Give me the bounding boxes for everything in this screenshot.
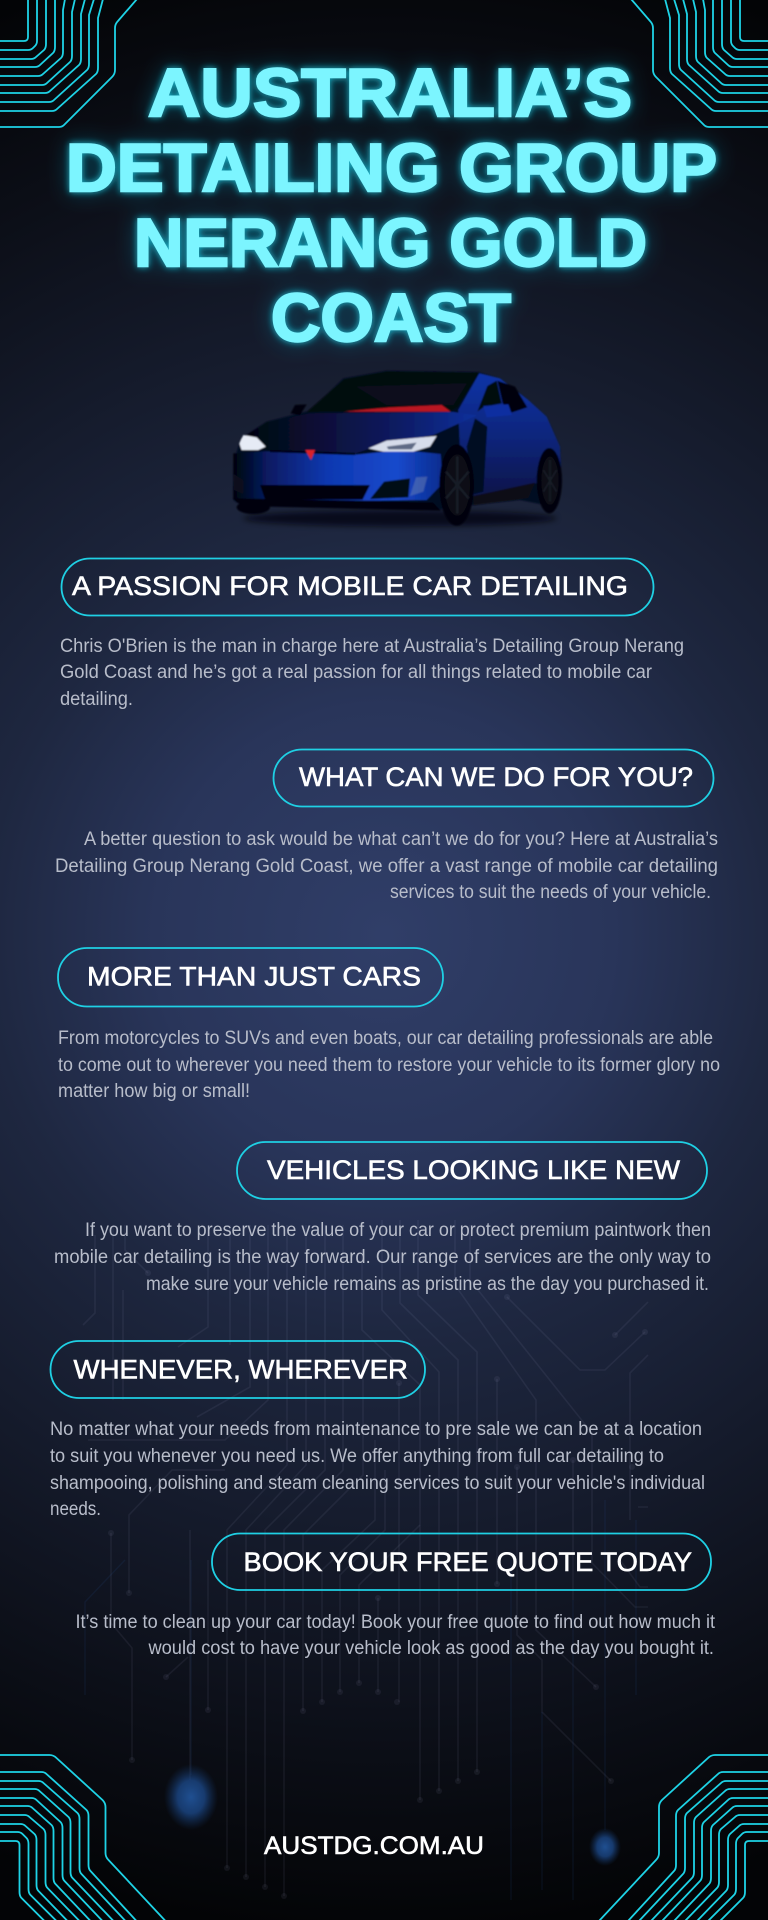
body text: what can we do: services to suit the needs of your vehicle.	[390, 882, 711, 903]
heading pill: book your free quote: BOOK YOUR FREE QUOTE TODAY	[244, 1547, 692, 1577]
title: COAST	[271, 280, 511, 356]
section 3	[58, 948, 720, 1102]
circuit board pattern	[83, 1220, 648, 1900]
body text: book your free quote: would cost to have your vehicle look as good as the day you bought it.	[148, 1638, 714, 1659]
body text: more than just cars: to come out to wherever you need them to restore your vehicle to its former glory no	[58, 1055, 720, 1076]
body text: what can we do: Detailing Group Nerang Gold Coast, we offer a vast range of mobile car detailing	[55, 856, 718, 877]
body text: whenever wherever: shampooing, polishing and steam cleaning services to suit your vehicle's individual	[50, 1473, 705, 1494]
body text: a passion: Chris O'Brien is the man in charge here at Australia’s Detailing Group Nerang	[60, 636, 684, 657]
body text: vehicles looking like new: mobile car detailing is the way forward. Our range of services are the only way to	[54, 1247, 711, 1268]
heading pill: book your free quote	[212, 1534, 711, 1590]
body text: more than just cars: From motorcycles to SUVs and even boats, our car detailing professionals are able	[58, 1028, 713, 1049]
footer website: AUSTDG.COM.AU	[264, 1832, 484, 1860]
body text: a passion: detailing.	[60, 689, 133, 710]
car illustration	[233, 371, 562, 526]
body text: a passion: Gold Coast and he’s got a real passion for all things related to mobile car	[60, 662, 653, 683]
section 4	[54, 1142, 711, 1295]
corner circuit: bottom left	[0, 1755, 166, 1920]
body text: what can we do	[55, 829, 718, 903]
section 5	[50, 1341, 705, 1520]
heading pill: a passion	[62, 558, 654, 616]
heading pill: whenever wherever: WHENEVER, WHEREVER	[74, 1354, 408, 1384]
heading pill: more than just cars: MORE THAN JUST CARS	[87, 962, 421, 992]
title: NERANG GOLD	[134, 205, 647, 281]
heading pill: vehicles looking like new: VEHICLES LOOKING LIKE NEW	[267, 1155, 681, 1185]
title: AUSTRALIA’S	[148, 55, 632, 131]
title	[66, 55, 717, 356]
section 6	[76, 1534, 716, 1659]
section 2	[55, 750, 718, 903]
body text: book your free quote: It’s time to clean up your car today! Book your free quote to find out how much it	[76, 1612, 716, 1633]
body text: whenever wherever: No matter what your needs from maintenance to pre sale we can be at a location	[50, 1419, 702, 1440]
glow: left blue light	[164, 1764, 218, 1830]
body text: vehicles looking like new	[54, 1220, 711, 1295]
section 1	[60, 558, 684, 710]
corner circuit: bottom right	[599, 1755, 768, 1920]
heading pill: what can we do: WHAT CAN WE DO FOR YOU?	[299, 762, 693, 792]
body text: more than just cars: matter how big or small!	[58, 1081, 250, 1102]
glow: right blue light	[589, 1828, 621, 1866]
corner circuit: top left	[0, 0, 137, 127]
body text: book your free quote	[76, 1612, 716, 1659]
heading pill: a passion: A PASSION FOR MOBILE CAR DETAILING	[72, 571, 628, 601]
body text: vehicles looking like new: make sure your vehicle remains as pristine as the day you purchased it.	[146, 1274, 709, 1295]
body text: whenever wherever: to suit you whenever you need us. We offer anything from full car detailing to	[50, 1446, 664, 1467]
heading pill: what can we do	[274, 750, 714, 806]
body text: vehicles looking like new: If you want to preserve the value of your car or protect premium paintwork then	[85, 1220, 711, 1241]
corner circuit: top right	[631, 0, 768, 127]
heading pill: more than just cars	[58, 948, 443, 1006]
heading pill: vehicles looking like new	[237, 1142, 707, 1199]
body text: what can we do: A better question to ask would be what can’t we do for you? Here at Australia’s	[84, 829, 718, 850]
heading pill: whenever wherever	[50, 1341, 425, 1398]
body text: whenever wherever	[50, 1419, 705, 1520]
title: DETAILING GROUP	[66, 130, 717, 206]
body text: whenever wherever: needs.	[50, 1499, 101, 1520]
body text: more than just cars	[58, 1028, 720, 1102]
body text: a passion	[60, 636, 684, 710]
